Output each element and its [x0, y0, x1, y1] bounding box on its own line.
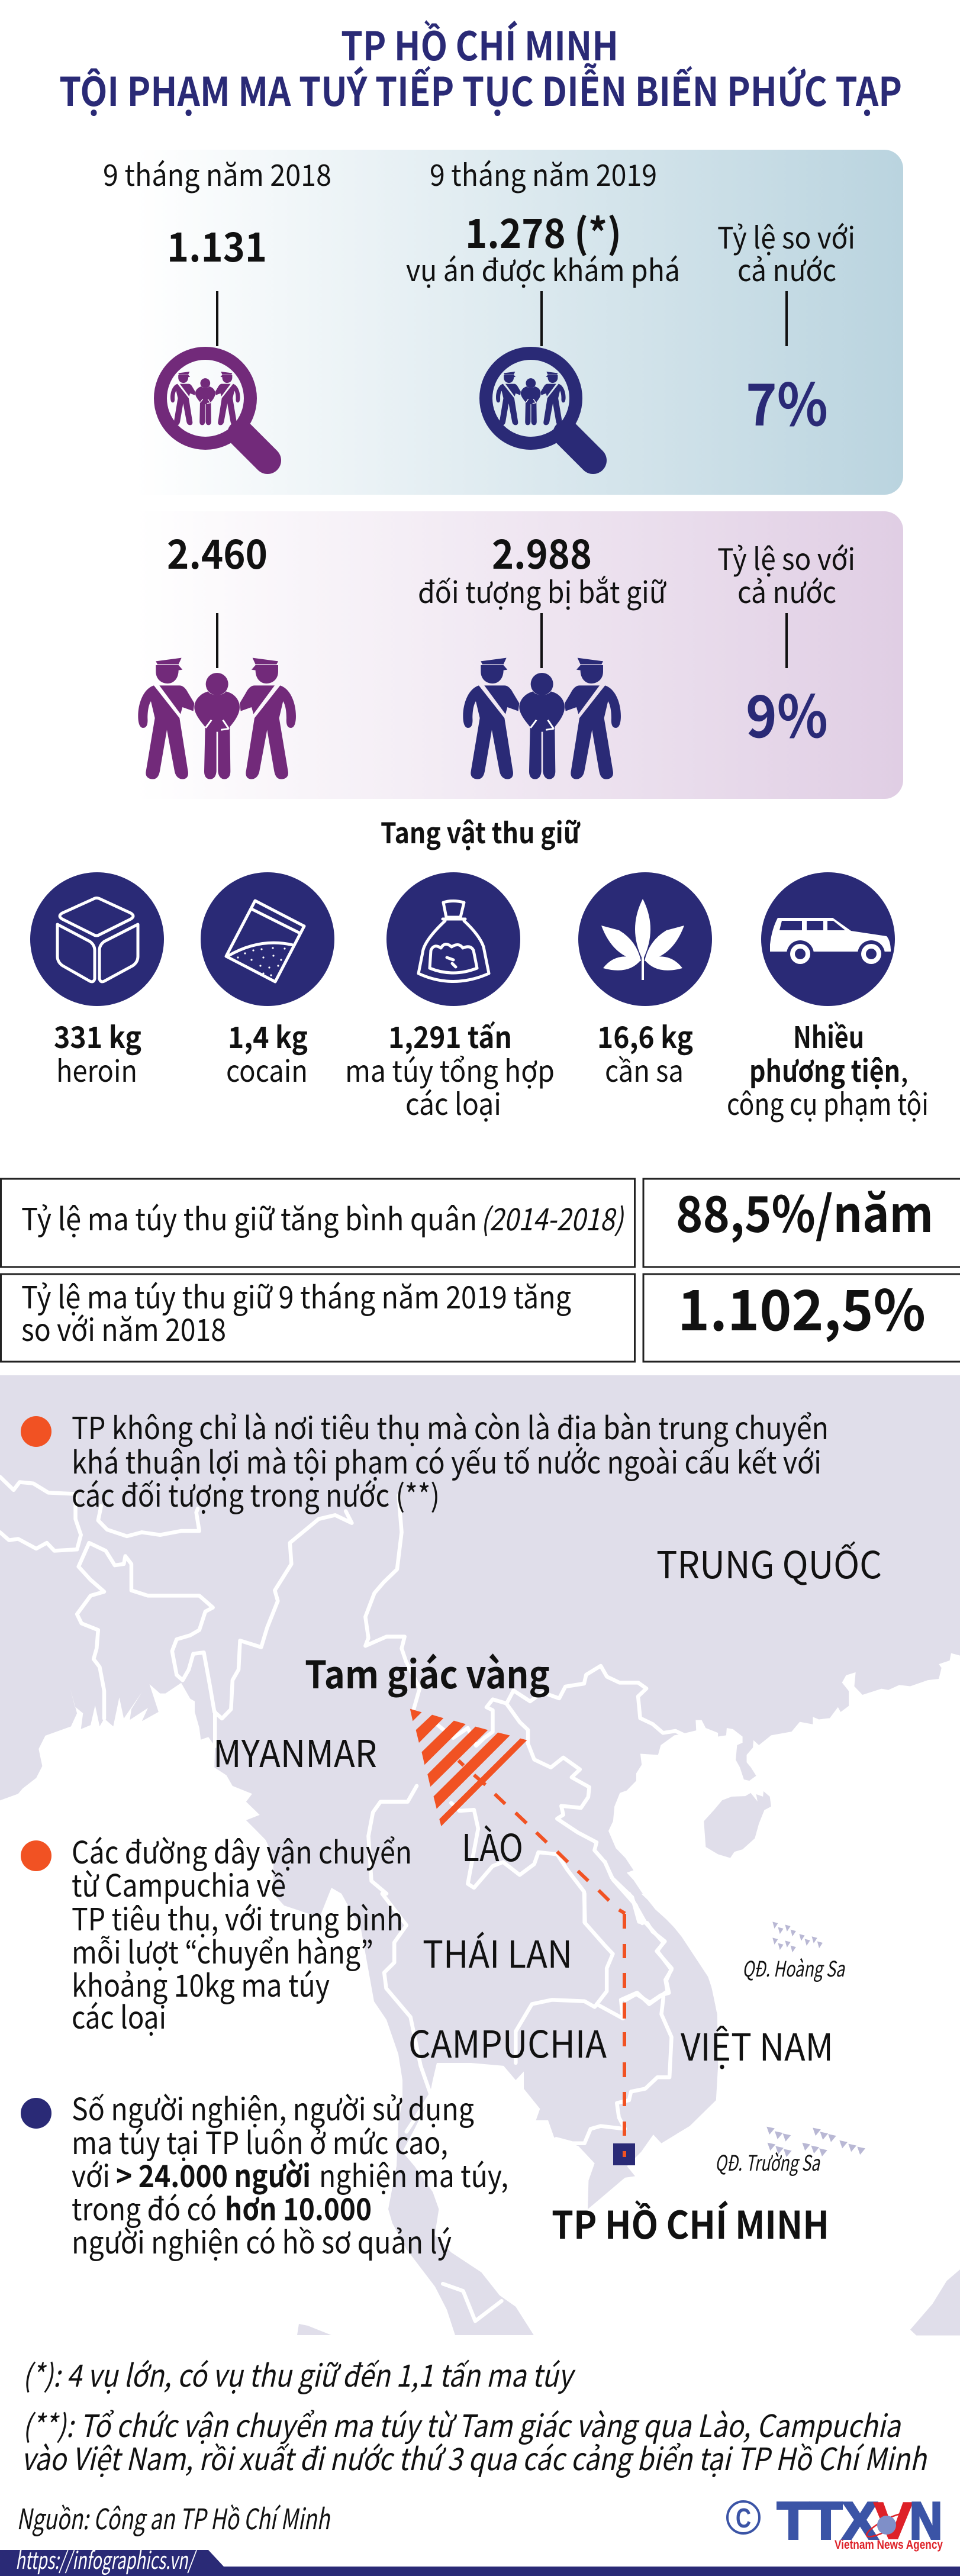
note 2	[21, 1828, 412, 2037]
country borders	[0, 1477, 684, 2321]
label: vehicles: ,	[900, 1048, 909, 1091]
icon: heroin cube	[30, 872, 164, 1006]
ratio label	[717, 215, 855, 290]
stat: cases 2018: 1.131	[167, 215, 267, 273]
label: heroin: 331 kg	[54, 1014, 141, 1057]
islands	[297, 1791, 960, 2335]
stat row: average seizure growth: (2014-2018)	[481, 1195, 624, 1239]
note 3: Số người nghiện, người sử dụng	[72, 2085, 474, 2129]
footnote 2	[21, 2401, 927, 2479]
stat row: 2019 seizure growth: Tỷ lệ ma túy thu giữ 9 tháng năm 2019 tăng	[21, 1273, 571, 1317]
panel: arrests	[118, 511, 903, 799]
label: vehicles: Nhiều	[793, 1014, 864, 1057]
icon: car	[761, 872, 895, 1006]
marker: Ho Chi Minh City	[613, 2143, 635, 2165]
stat row: 2019 seizure growth	[1, 1266, 960, 1362]
note 2: từ Campuchia về	[72, 1861, 286, 1906]
stat row: average seizure growth: Tỷ lệ ma túy thu giữ tăng bình quân	[21, 1195, 477, 1239]
note 3: ma túy tại TP luôn ở mức cao,	[72, 2119, 448, 2163]
icon: cannabis leaf	[578, 872, 712, 1006]
footer bar	[0, 2542, 960, 2576]
stat: cases 2019: 1.278 (*)	[465, 201, 621, 260]
logo: TTXVN: C	[736, 2503, 751, 2533]
column headings: 9 tháng năm 2018	[103, 152, 331, 195]
stat: arrests 2018: 2.460	[167, 522, 268, 581]
ratio label: cả nước	[737, 569, 836, 612]
label: vehicles: phương tiện	[749, 1048, 900, 1091]
map labels: MYANMAR	[213, 1724, 377, 1778]
label: cannabis	[597, 1014, 693, 1091]
icon: magnifier purple	[160, 353, 268, 460]
map	[0, 1375, 960, 2335]
stat row: average seizure growth: 88,5%/năm	[676, 1175, 933, 1247]
label: synthetic drugs	[345, 1014, 555, 1124]
logo: TTXVN: TTX	[777, 2491, 878, 2550]
logo: TTXVN	[727, 2491, 943, 2552]
note 1: TP không chỉ là nơi tiêu thụ mà còn là địa bàn trung chuyển	[72, 1404, 829, 1448]
source: Nguồn: Công an TP Hồ Chí Minh	[17, 2496, 331, 2538]
stat: arrests 2019	[418, 522, 667, 612]
map labels: CAMPUCHIA	[408, 2015, 607, 2069]
label: cocaine: cocain	[226, 1048, 308, 1091]
note 2: các loại	[72, 1993, 166, 2037]
ratio 9%: 9%	[746, 670, 828, 755]
note 3: > 24.000 người	[116, 2152, 311, 2196]
note 2: Các đường dây vận chuyển	[72, 1828, 412, 1872]
Bay of Bengal	[0, 1683, 455, 2335]
panel: cases solved	[103, 150, 903, 495]
archipelago: Hoang Sa	[772, 1921, 823, 1952]
footnote 1: (*): 4 vụ lớn, có vụ thu giữ đến 1,1 tấn ma túy	[22, 2351, 576, 2396]
note 2: TP tiêu thụ, với trung bình	[72, 1895, 403, 1939]
label: vehicles: công cụ phạm tội	[727, 1081, 929, 1124]
label: heroin	[54, 1014, 141, 1091]
column headings	[103, 152, 657, 195]
Golden Triangle hatched	[410, 1709, 527, 1826]
icon: arrest navy	[463, 658, 621, 779]
label: heroin: heroin	[56, 1048, 137, 1091]
map labels: VIỆT NAM	[681, 2018, 833, 2072]
note 3: người nghiện có hồ sơ quản lý	[72, 2218, 452, 2262]
map labels: TRUNG QUỐC	[656, 1536, 882, 1590]
footer bar: https://infographics.vn/	[15, 2542, 198, 2576]
heading: seized items: Tang vật thu giữ	[381, 810, 581, 852]
note 3: nghiện ma túy,	[319, 2152, 508, 2196]
label: cocaine	[226, 1014, 308, 1091]
note 2: khoảng 10kg ma túy	[72, 1961, 330, 2006]
ratio label: cả nước	[737, 247, 836, 290]
note 1	[21, 1404, 829, 1516]
title	[59, 15, 902, 118]
ratio 7%: 7%	[746, 359, 828, 443]
icon: cocaine bag	[201, 872, 334, 1006]
note 3: trong đó có	[72, 2185, 217, 2229]
South China Sea	[402, 1653, 960, 2335]
map labels: QĐ. Hoàng Sa	[742, 1952, 845, 1983]
ratio label: Tỷ lệ so với	[717, 536, 855, 579]
stat row: average seizure growth	[1, 1175, 960, 1267]
ratio label: Tỷ lệ so với	[717, 215, 855, 257]
note 2: mỗi lượt “chuyển hàng”	[72, 1928, 373, 1972]
map labels: TP HỒ CHÍ MINH	[552, 2195, 829, 2250]
label: cannabis: 16,6 kg	[597, 1014, 693, 1057]
map labels	[213, 1536, 882, 2250]
icon: arrest purple	[138, 658, 296, 779]
note 3: hơn 10.000	[225, 2185, 372, 2229]
column headings: 9 tháng năm 2019	[430, 152, 657, 195]
stat: cases 2019: vụ án được khám phá	[406, 247, 680, 290]
map labels: LÀO	[462, 1819, 523, 1872]
ratio label	[717, 536, 855, 612]
note 3: với	[72, 2152, 110, 2196]
note 3	[21, 2085, 508, 2262]
stat: arrests 2019: đối tượng bị bắt giữ	[418, 569, 667, 612]
logo: TTXVN: N	[910, 2491, 942, 2550]
label: vehicles	[727, 1014, 929, 1124]
label: synthetic drugs: các loại	[405, 1081, 501, 1124]
label: synthetic drugs: 1,291 tấn	[388, 1014, 512, 1057]
note 1: các đối tượng trong nước (**)	[72, 1471, 440, 1516]
label: cannabis: cần sa	[605, 1048, 684, 1091]
icon: synthetic drug sack	[386, 872, 520, 1006]
map labels: QĐ. Trường Sa	[715, 2146, 820, 2177]
archipelago: Truong Sa	[766, 2127, 865, 2157]
route: dashed line	[459, 1761, 625, 2136]
icon: magnifier navy	[486, 353, 593, 460]
logo: TTXVN: V	[874, 2491, 913, 2550]
title: TP HỒ CHÍ MINH	[341, 15, 618, 72]
label: cocaine: 1,4 kg	[228, 1014, 308, 1057]
stat: cases 2019	[406, 201, 680, 290]
stat row: 2019 seizure growth: 1.102,5%	[678, 1266, 926, 1347]
stat row: 2019 seizure growth: so với năm 2018	[21, 1305, 226, 1350]
map labels: Tam giác vàng	[305, 1645, 550, 1700]
map labels: THÁI LAN	[423, 1925, 572, 1979]
label: synthetic drugs: ma túy tổng hợp	[345, 1048, 555, 1091]
stat: arrests 2019: 2.988	[492, 522, 592, 581]
note 1: khá thuận lợi mà tội phạm có yếu tố nước ngoài cấu kết với	[72, 1438, 822, 1482]
